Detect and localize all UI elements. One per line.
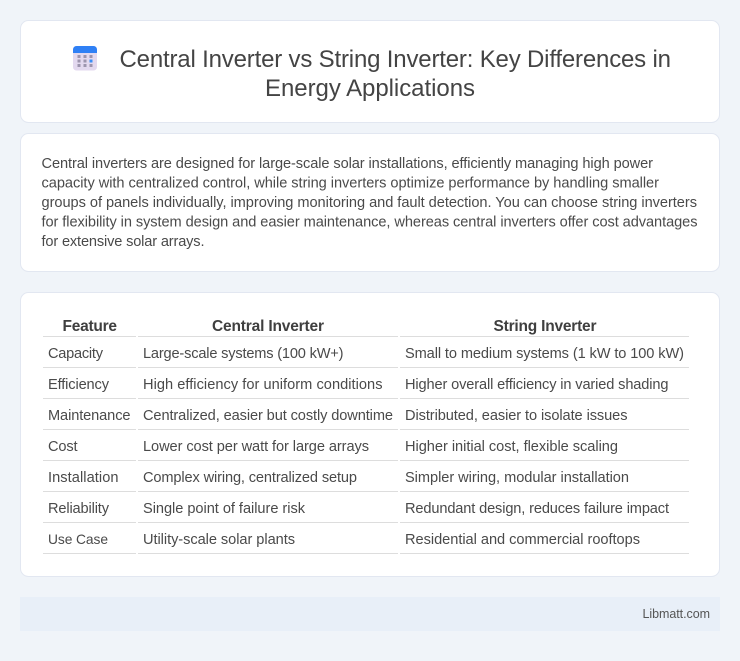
table row: efficiency: Efficiency [48,377,110,393]
table row: capacity: Capacity [48,346,104,362]
table row: capacity: Large-scale systems (100 kW+) [143,346,344,362]
table row: reliability: Single point of failure risk [143,501,306,517]
table row: maintenance: Centralized, easier but costly downtime [143,408,393,424]
table row: maintenance: Distributed, easier to isolate issues [405,408,628,424]
table row: efficiency: Higher overall efficiency in varied shading [405,377,668,393]
table row: efficiency [43,377,689,399]
table row: installation: Simpler wiring, modular installation [405,470,629,486]
icon: calendar [73,46,97,70]
table row: installation [43,470,689,492]
table row: cost [43,439,689,461]
table row: reliability: Reliability [48,501,110,517]
title [120,46,671,102]
text block: introduction paragraph: for flexibility in system design and easier maintenance, whereas central inverters offer cost advantages [42,214,698,230]
table row: cost: Higher initial cost, flexible scaling [405,439,618,455]
table row: use case [43,532,689,554]
text block: introduction paragraph: for extensive solar arrays. [42,234,204,250]
text block: introduction paragraph: groups of panels individually, improving monitoring and fault detection. You can choose string inverters [42,195,697,211]
table row: cost: Cost [48,439,78,455]
text block: introduction paragraph [42,156,698,250]
panel: title header [20,20,720,122]
table row: reliability [43,501,689,523]
table row: cost: Lower cost per watt for large arrays [143,439,369,455]
table header row: String Inverter [494,318,596,335]
table row: capacity [43,346,689,368]
table row: maintenance [43,408,689,430]
footer: Libmatt.com [642,607,710,621]
panel: introduction [20,134,720,272]
table row: use case: Utility-scale solar plants [143,532,295,548]
table header row: Feature [62,318,117,335]
footer [20,597,720,631]
table header row [43,318,689,337]
title: Central Inverter vs String Inverter: Key Differences in [120,46,671,73]
table row: use case: Residential and commercial rooftops [405,532,640,548]
table row: maintenance: Maintenance [48,408,130,424]
table row: capacity: Small to medium systems (1 kW to 100 kW) [405,346,684,362]
table row: reliability: Redundant design, reduces failure impact [405,501,669,517]
table row: use case: Use Case [48,532,108,547]
table row: efficiency: High efficiency for uniform conditions [143,377,382,393]
table header row: Central Inverter [212,318,324,335]
text block: introduction paragraph: capacity with centralized control, while string inverters optimize performance by handling smaller [42,176,659,192]
text block: introduction paragraph: Central inverters are designed for large-scale solar installations, efficiently managing high power [42,156,653,172]
table row: installation: Installation [48,470,118,486]
table row: installation: Complex wiring, centralized setup [143,470,357,486]
panel: comparison table [20,292,720,576]
title: Energy Applications [265,75,475,102]
